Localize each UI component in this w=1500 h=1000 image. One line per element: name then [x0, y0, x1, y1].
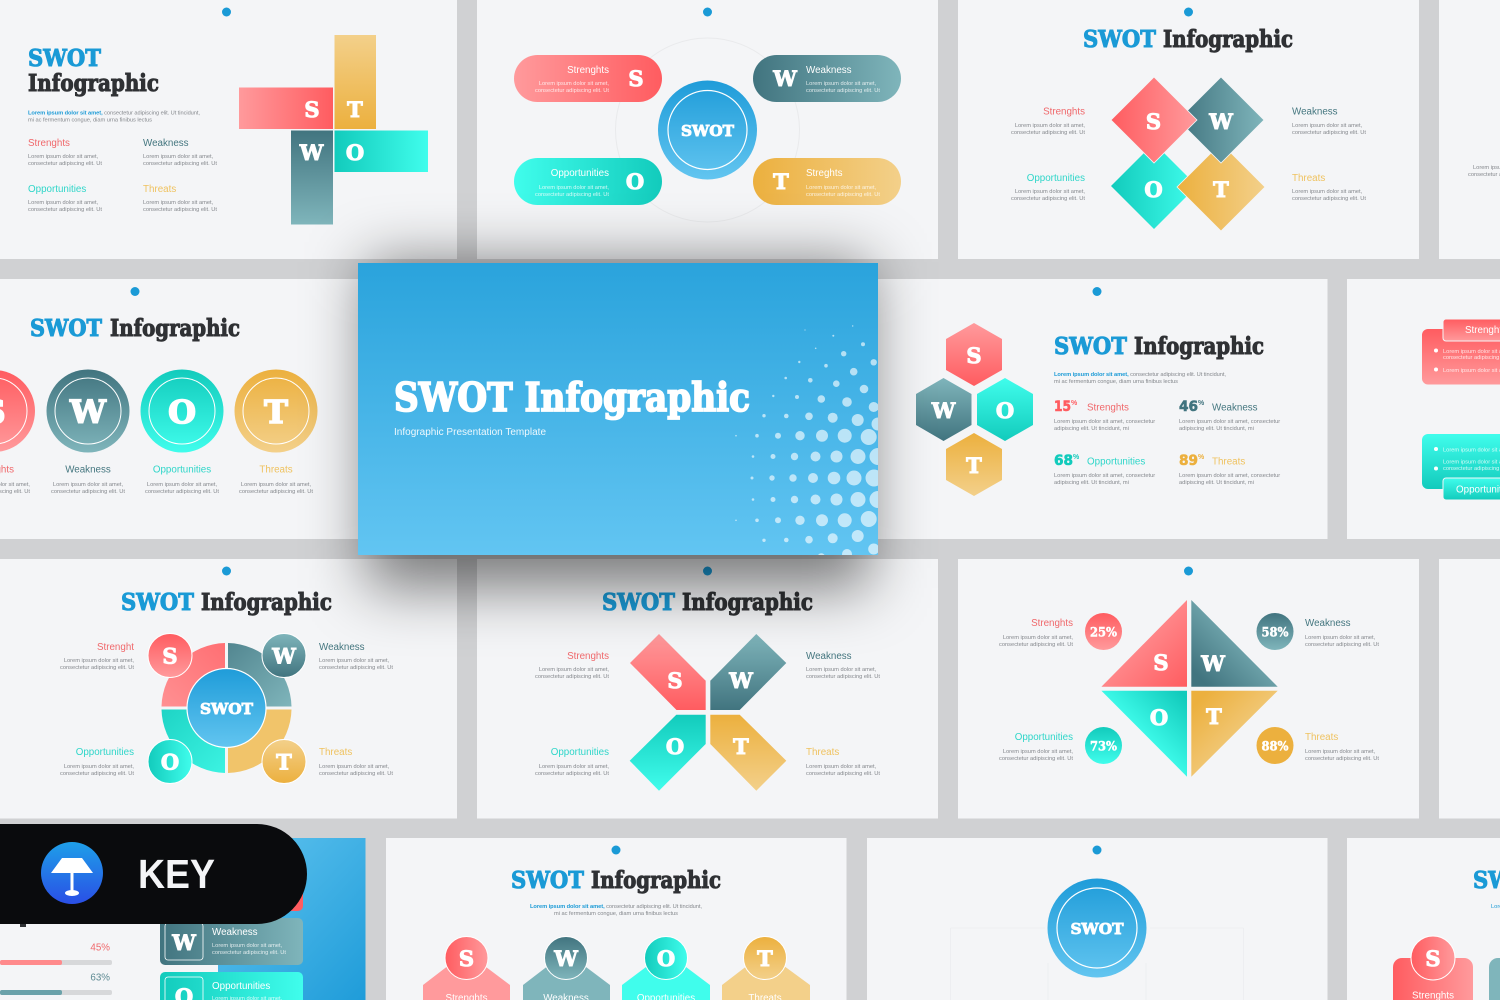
panel: hexagon slide: Threats	[1212, 456, 1245, 468]
hero subtitle: Infographic Presentation Template	[394, 427, 546, 438]
panel: cropped cards slide	[1347, 279, 1500, 539]
panel: circles slide: Threats	[259, 464, 293, 476]
panel: diamonds slide: Threats	[1292, 173, 1325, 184]
panel: hexagon slide: %	[1071, 400, 1078, 407]
panel: hexagon slide: S	[966, 343, 982, 368]
panel: hexagon slide: O	[996, 398, 1014, 423]
panel: four columns slide	[386, 838, 846, 1000]
panel: pinwheel slide	[0, 0, 457, 259]
panel: diamonds slide: Strenghts	[1043, 106, 1085, 118]
panel: pills slide: Opportunities	[551, 168, 609, 179]
panel: hexagon slide: Lorem ipsum dolor sit amet, consectetur	[1179, 473, 1280, 479]
panel: circles slide: T	[264, 393, 288, 431]
panel: four columns slide: SWOT	[511, 867, 584, 894]
icon: Keynote lectern	[41, 842, 103, 904]
panel: pills slide: S	[628, 66, 644, 91]
panel: pinwheel slide: Infographic	[28, 70, 159, 97]
panel: circles slide: Opportunities	[153, 464, 211, 476]
panel: hero cover slide	[358, 263, 886, 561]
panel: quartered circle slide: Lorem ipsum dolor sit amet,	[64, 658, 134, 664]
panel: hexagon slide: adipiscing elit. Ut tincidunt, mi	[1054, 480, 1129, 486]
panel: pinwheel slide: S	[304, 97, 320, 122]
badge: KEY format	[0, 824, 307, 924]
panel: quartered circle slide: Weakness	[319, 642, 365, 653]
halftone dots	[735, 325, 886, 561]
panel: quartered circle slide: T	[276, 750, 292, 774]
panel: circles slide: W	[69, 393, 107, 431]
panel: diamonds slide: Lorem ipsum dolor sit amet,	[1292, 123, 1363, 129]
panel: diamonds slide: Lorem ipsum dolor sit amet,	[1015, 189, 1085, 195]
panel: cropped slide row three right	[1439, 559, 1500, 818]
panel: pills slide: Lorem ipsum dolor sit amet,	[539, 81, 609, 87]
panel: hexagon slide: 46	[1179, 399, 1198, 415]
panel: quartered circle slide: Infographic	[201, 589, 332, 616]
panel: big diamond slide	[958, 559, 1419, 818]
panel: diamonds slide: O	[1144, 177, 1163, 202]
panel: four arrows slide: W	[728, 668, 753, 693]
panel: circles slide	[0, 279, 358, 539]
panel: four columns slide: T	[757, 946, 773, 971]
panel: pinwheel slide: consectetur adipiscing elit. Ut	[28, 207, 102, 213]
panel: quartered circle slide: SWOT	[121, 589, 194, 616]
panel: circles slide: consectetur adipiscing elit. Ut	[51, 489, 125, 495]
panel: pinwheel slide: Lorem ipsum dolor sit amet,	[143, 154, 214, 160]
panel: hexagon slide: %	[1073, 454, 1080, 461]
panel: big diamond slide: 58%	[1262, 626, 1289, 640]
panel: pinwheel slide: W	[299, 140, 324, 165]
panel: progress bars and cards slide: 63%	[90, 972, 110, 984]
panel: pinwheel slide: Opportunities	[28, 184, 86, 195]
panel: circles slide: consectetur adipiscing elit. Ut	[239, 489, 313, 495]
panel: pills slide: SWOT	[681, 122, 735, 140]
panel: progress bars and cards slide: Opportunities	[212, 981, 270, 992]
panel: diamonds slide: consectetur adipiscing elit. Ut	[1292, 196, 1366, 202]
panel: four arrows slide: Lorem ipsum dolor sit amet,	[806, 764, 877, 770]
panel: cropped rounded cards slide	[1347, 838, 1500, 1000]
panel: four arrows slide	[477, 559, 938, 818]
panel: cropped rounded cards slide: S	[1425, 946, 1441, 971]
panel: pinwheel slide: Lorem ipsum dolor sit amet, consectetur adipiscing elit. Ut tincidunt,	[28, 110, 200, 116]
panel: circles slide: O	[168, 393, 196, 431]
panel: big diamond slide: consectetur adipiscing elit. Ut	[999, 756, 1073, 762]
panel: four arrows slide: Lorem ipsum dolor sit amet,	[539, 667, 609, 673]
panel: four arrows slide: O	[666, 734, 684, 759]
panel: pills slide: consectetur adipiscing elit. Ut	[535, 88, 609, 94]
panel: pinwheel slide: Lorem ipsum dolor sit amet,	[28, 200, 99, 206]
panel: diamonds slide: consectetur adipiscing elit. Ut	[1011, 196, 1085, 202]
panel: hexagon slide: T	[966, 453, 982, 478]
panel: hexagon slide: 89	[1179, 453, 1198, 469]
panel: quartered circle slide: Threats	[319, 747, 352, 758]
panel: circles slide: Lorem ipsum dolor sit amet,	[53, 482, 124, 488]
panel: big diamond slide: W	[1200, 651, 1225, 676]
panel: diamonds slide: T	[1213, 177, 1229, 202]
panel: central circle tree slide: SWOT	[1070, 920, 1124, 938]
panel: pills slide: Strenghts	[567, 65, 609, 76]
panel: progress bars and cards slide: W	[171, 930, 196, 955]
panel: diamonds slide: Lorem ipsum dolor sit amet,	[1292, 189, 1363, 195]
panel: circles slide: Weakness	[65, 464, 111, 476]
panel: diamonds slide: Opportunities	[1027, 173, 1085, 184]
panel: four arrows slide: consectetur adipiscing elit. Ut	[535, 674, 609, 680]
panel: four arrows slide: S	[667, 668, 683, 693]
panel: progress bars and cards slide: consectetur adipiscing elit. Ut	[212, 950, 286, 956]
panel: pills slide: consectetur adipiscing elit. Ut	[535, 192, 609, 198]
panel: diamonds slide: Infographic	[1163, 26, 1293, 53]
panel: quartered circle slide: consectetur adipiscing elit. Ut	[319, 665, 393, 671]
panel: four arrows slide: consectetur adipiscing elit. Ut	[806, 771, 880, 777]
panel: quartered circle slide	[0, 559, 457, 818]
panel: progress bars and cards slide: 45%	[90, 942, 110, 954]
panel: pinwheel slide: consectetur adipiscing elit. Ut	[143, 207, 217, 213]
panel: pinwheel slide: Weakness	[143, 138, 189, 149]
panel: four arrows slide: consectetur adipiscing elit. Ut	[806, 674, 880, 680]
panel: quartered circle slide: W	[271, 644, 296, 668]
panel: hexagon slide: Lorem ipsum dolor sit amet, consectetur adipiscing elit. Ut tincidunt,	[1054, 372, 1226, 378]
panel: hexagon slide: 68	[1054, 453, 1073, 469]
panel: pinwheel slide: consectetur adipiscing elit. Ut	[143, 161, 217, 167]
panel: big diamond slide: consectetur adipiscing elit. Ut	[999, 642, 1073, 648]
panel: four columns slide: mi ac fermentum congue, diam urna finibus lectus	[554, 911, 678, 917]
panel: progress bars and cards slide: Weakness	[212, 927, 258, 938]
panel: pinwheel slide: Lorem ipsum dolor sit amet,	[28, 154, 99, 160]
panel: quartered circle slide: Lorem ipsum dolor sit amet,	[319, 764, 390, 770]
panel: pills slide: Weakness	[806, 65, 852, 76]
panel: pills slide: Lorem ipsum dolor sit amet,	[806, 81, 877, 87]
panel: four arrows slide: Threats	[806, 747, 839, 758]
panel: big diamond slide: Lorem ipsum dolor sit amet,	[1305, 749, 1376, 755]
panel: hexagon slide: adipiscing elit. Ut tincidunt, mi	[1054, 426, 1129, 432]
panel: big diamond slide: 25%	[1090, 626, 1118, 640]
panel: diamonds slide: W	[1208, 109, 1233, 134]
panel: pills slide: Lorem ipsum dolor sit amet,	[806, 185, 877, 191]
panel: big diamond slide: Lorem ipsum dolor sit amet,	[1305, 635, 1376, 641]
panel: hexagon slide: Lorem ipsum dolor sit amet, consectetur	[1054, 419, 1155, 425]
panel: diamonds slide: consectetur adipiscing elit. Ut	[1292, 130, 1366, 136]
panel: quartered circle slide: SWOT	[200, 700, 254, 718]
panel: pills slide: T	[773, 169, 789, 194]
panel: hexagon slide: SWOT	[1054, 333, 1127, 360]
panel: big diamond slide: 88%	[1262, 740, 1289, 754]
panel: diamonds slide: Lorem ipsum dolor sit amet,	[1015, 123, 1085, 129]
panel: pinwheel slide: Threats	[143, 184, 176, 195]
panel: pinwheel slide: consectetur adipiscing elit. Ut	[28, 161, 102, 167]
panel: pinwheel slide: O	[346, 140, 364, 165]
panel: hexagon slide: %	[1198, 454, 1205, 461]
panel: four arrows slide: T	[733, 734, 749, 759]
panel: pills slide: O	[626, 169, 644, 194]
panel: big diamond slide: consectetur adipiscing elit. Ut	[1305, 756, 1379, 762]
panel: diamonds slide: SWOT	[1083, 26, 1156, 53]
panel: big diamond slide: Opportunities	[1015, 732, 1073, 743]
panel: pills slide	[477, 0, 938, 259]
panel: hexagon slide: Infographic	[1134, 333, 1264, 360]
panel: big diamond slide: Threats	[1305, 732, 1338, 743]
panel: four arrows slide: Weakness	[806, 651, 852, 662]
panel: quartered circle slide: consectetur adipiscing elit. Ut	[60, 771, 134, 777]
panel: hexagon slide: Strenghts	[1087, 402, 1129, 414]
panel: quartered circle slide: Lorem ipsum dolor sit amet,	[319, 658, 390, 664]
hero shadow	[366, 262, 870, 588]
panel: big diamond slide: 73%	[1090, 740, 1118, 754]
panel: four arrows slide: Lorem ipsum dolor sit amet,	[806, 667, 877, 673]
panel: pinwheel slide: T	[347, 97, 363, 122]
panel: circles slide: SWOT	[30, 315, 102, 342]
panel: quartered circle slide: Opportunities	[76, 747, 134, 758]
panel: pills slide: consectetur adipiscing elit. Ut	[806, 192, 880, 198]
panel: diamonds slide: consectetur adipiscing elit. Ut	[1011, 130, 1085, 136]
panel: four columns slide: S	[459, 946, 474, 971]
panel: four arrows slide: SWOT	[602, 589, 675, 616]
panel: four arrows slide: Lorem ipsum dolor sit amet,	[539, 764, 609, 770]
panel: big diamond slide: Weakness	[1305, 618, 1351, 629]
panel: four columns slide: Lorem ipsum dolor sit amet, consectetur adipiscing elit. Ut tincidunt,	[530, 904, 702, 910]
panel: quartered circle slide: Lorem ipsum dolor sit amet,	[64, 764, 134, 770]
panel: progress bars and cards slide	[0, 838, 366, 1000]
panel: circles slide: Lorem ipsum dolor sit amet,	[147, 482, 218, 488]
panel: four arrows slide: consectetur adipiscing elit. Ut	[535, 771, 609, 777]
panel: pills slide: consectetur adipiscing elit. Ut	[806, 88, 880, 94]
panel: four columns slide: W	[553, 946, 578, 971]
panel: diamonds slide: Weakness	[1292, 106, 1338, 118]
panel: big diamond slide: S	[1153, 650, 1169, 675]
panel: big diamond slide: Lorem ipsum dolor sit amet,	[1003, 635, 1073, 641]
panel: hexagon slide: Lorem ipsum dolor sit amet, consectetur	[1054, 473, 1155, 479]
panel: pills slide: Streghts	[806, 168, 843, 179]
panel: big diamond slide: consectetur adipiscing elit. Ut	[1305, 642, 1379, 648]
panel: diamonds slide: S	[1146, 109, 1161, 134]
badge label: KEY	[138, 851, 215, 897]
panel: four arrows slide: Strenghts	[567, 651, 609, 662]
panel: pinwheel slide: Lorem ipsum dolor sit amet,	[143, 200, 214, 206]
panel: hexagon slide: mi ac fermentum congue, diam urna finibus lectus	[1054, 379, 1178, 385]
panel: pinwheel slide: mi ac fermentum congue, diam urna finibus lectus	[28, 118, 152, 124]
panel: four arrows slide: Infographic	[682, 589, 813, 616]
panel: hexagon slide: W	[931, 398, 956, 423]
panel: pinwheel slide: Strenghts	[28, 138, 70, 149]
panel: hexagon slide: Weakness	[1212, 402, 1258, 414]
panel: quartered circle slide: S	[162, 644, 178, 668]
panel: quartered circle slide: O	[161, 750, 179, 774]
panel: diamonds slide	[958, 0, 1419, 259]
panel: quartered circle slide: consectetur adipiscing elit. Ut	[319, 771, 393, 777]
panel: circles slide: consectetur adipiscing elit. Ut	[145, 489, 219, 495]
panel: hexagon slide: 15	[1054, 399, 1071, 415]
panel: big diamond slide: O	[1150, 705, 1168, 730]
panel: pinwheel slide: SWOT	[28, 45, 101, 72]
panel: circles slide: Lorem ipsum dolor sit amet,	[241, 482, 312, 488]
panel: big diamond slide: Strenghts	[1031, 618, 1073, 629]
panel: big diamond slide: Lorem ipsum dolor sit amet,	[1003, 749, 1073, 755]
panel: pills slide: Lorem ipsum dolor sit amet,	[539, 185, 609, 191]
hero title: SWOT Infographic	[394, 375, 750, 421]
panel: central circle tree slide	[867, 838, 1328, 1000]
panel: four columns slide: Infographic	[591, 867, 721, 894]
panel: hexagon slide: adipiscing elit. Ut tincidunt, mi	[1179, 480, 1254, 486]
panel: hexagon slide: Lorem ipsum dolor sit amet, consectetur	[1179, 419, 1280, 425]
panel: quartered circle slide: consectetur adipiscing elit. Ut	[60, 665, 134, 671]
panel: circles slide: Infographic	[110, 315, 240, 342]
panel: four arrows slide: Opportunities	[551, 747, 609, 758]
panel: hexagon slide	[800, 279, 1328, 539]
panel: hexagon slide: adipiscing elit. Ut tincidunt, mi	[1179, 426, 1254, 432]
panel: hexagon slide: %	[1198, 400, 1205, 407]
panel: progress bars and cards slide: Lorem ipsum dolor sit amet,	[212, 943, 283, 949]
panel: cropped slide top right	[1439, 0, 1500, 259]
panel: quartered circle slide: Strenght	[97, 642, 134, 653]
panel: four columns slide: O	[657, 946, 675, 971]
panel: pills slide: W	[772, 66, 797, 91]
panel: hexagon slide: Opportunities	[1087, 456, 1145, 468]
panel: big diamond slide: T	[1206, 704, 1222, 729]
